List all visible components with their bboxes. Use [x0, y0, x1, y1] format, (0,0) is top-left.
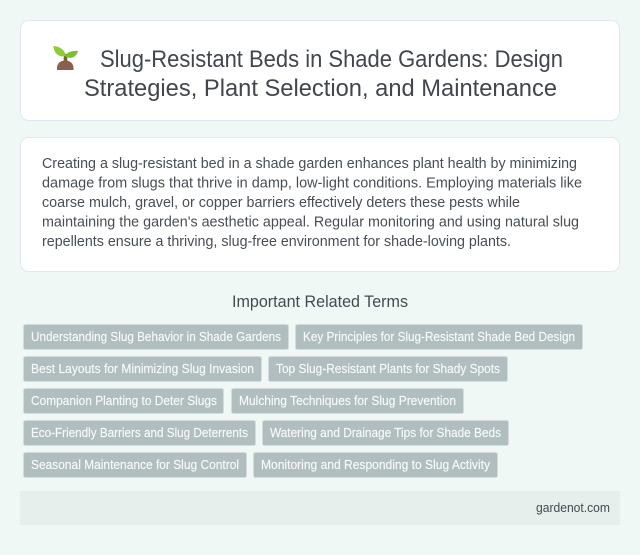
tag: [296, 324, 582, 350]
tag: Watering and Drainage Tips for Shade Beds: [270, 426, 501, 440]
text block: description: Creating a slug-resistant bed in a shade garden enhances plant health by minimizing: [42, 155, 577, 172]
footer: [20, 491, 620, 525]
footer: gardenot.com: [536, 501, 610, 515]
tag: [24, 388, 224, 414]
panel: description: [20, 138, 620, 272]
title: [84, 46, 563, 102]
tags: related terms: [24, 324, 582, 478]
text block: description: repellents ensure a thriving, slug-free environment for shade-loving plants.: [42, 233, 511, 250]
tag: Eco-Friendly Barriers and Slug Deterrents: [31, 426, 248, 440]
text block: description: [42, 155, 582, 250]
panel: title card: [20, 20, 620, 120]
heading: important related terms: Important Related Terms: [232, 293, 408, 311]
tag: Top Slug-Resistant Plants for Shady Spots: [276, 362, 500, 376]
text block: description: coarse mulch, gravel, or copper barriers effectively deters these pests while: [42, 194, 520, 211]
text block: description: damage from slugs that thrive in damp, low-light conditions. Employing materials like: [42, 174, 582, 192]
tag: Best Layouts for Minimizing Slug Invasion: [31, 362, 254, 376]
text block: description: maintaining the garden's aesthetic appeal. Regular monitoring and using natural slug: [42, 214, 579, 230]
tag: Key Principles for Slug-Resistant Shade Bed Design: [303, 330, 575, 344]
tag: Seasonal Maintenance for Slug Control: [31, 458, 239, 472]
tag: Mulching Techniques for Slug Prevention: [239, 394, 456, 408]
tag: Companion Planting to Deter Slugs: [31, 394, 217, 408]
tag: Understanding Slug Behavior in Shade Gardens: [31, 330, 281, 344]
tag: [24, 420, 256, 446]
title: Slug-Resistant Beds in Shade Gardens: Design: [100, 46, 563, 73]
icon: seedling: [54, 46, 78, 70]
tag: [268, 356, 508, 382]
tag: [24, 356, 262, 382]
tag: [232, 388, 464, 414]
tag: [254, 452, 498, 478]
tag: [262, 420, 508, 446]
tag: [24, 324, 288, 350]
tag: Monitoring and Responding to Slug Activity: [261, 458, 491, 472]
title: Strategies, Plant Selection, and Maintenance: [84, 75, 557, 102]
tag: [24, 452, 246, 478]
